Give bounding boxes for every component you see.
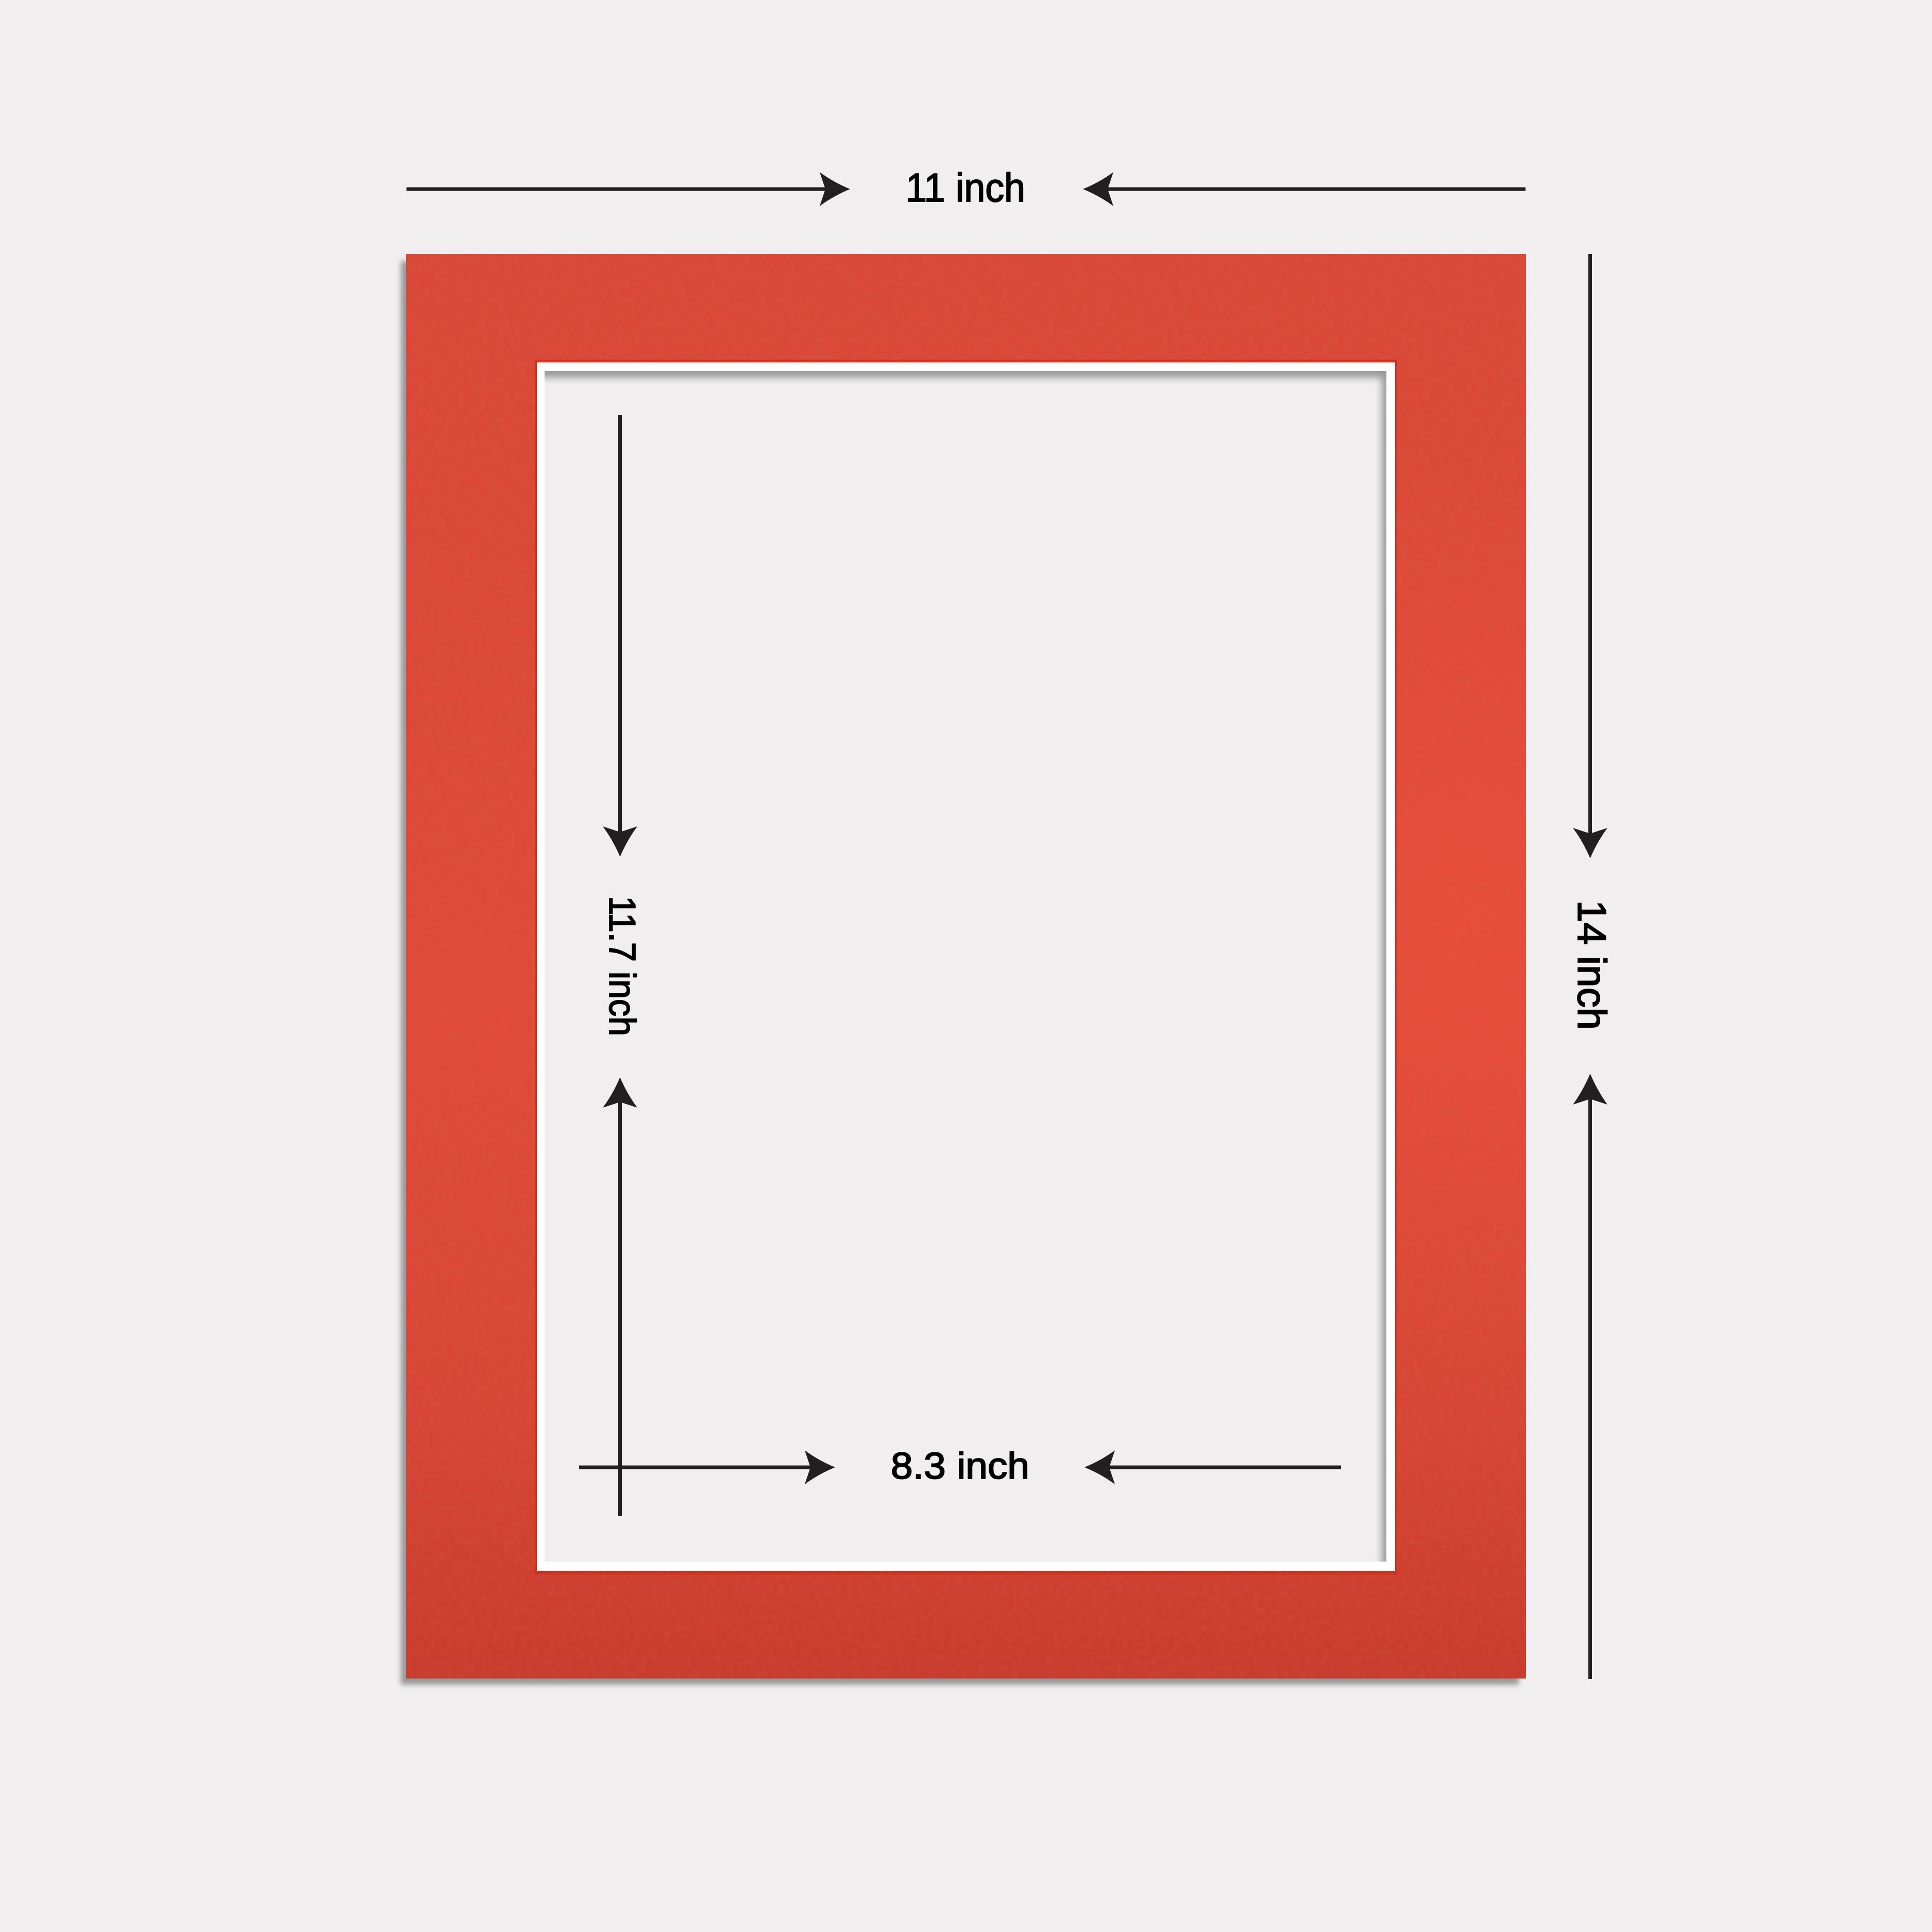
mat board paper texture <box>406 254 1526 1679</box>
dimension: overall height 14 inch <box>1569 254 1615 1679</box>
arrow: opening width right <box>1084 1450 1341 1484</box>
mat board drop shadow <box>401 261 1519 1685</box>
label: 11.7 inch: 11.7 inch <box>601 896 642 1036</box>
label: 14 inch: 14 inch <box>1569 900 1615 1030</box>
arrow: height top <box>1573 254 1607 858</box>
arrow: opening height top <box>603 415 637 857</box>
window opening <box>545 371 1386 1562</box>
window inner shadow <box>545 371 1386 1562</box>
arrow: width right <box>1083 172 1526 206</box>
arrow: height bottom <box>1573 1074 1607 1679</box>
dimension: opening height 11.7 inch <box>601 415 642 1516</box>
label: 8.3 inch: 8.3 inch <box>891 1446 1029 1487</box>
arrow: opening width left <box>579 1450 835 1484</box>
arrow: opening height bottom <box>603 1077 637 1516</box>
dimension: overall width 11 inch <box>406 165 1526 210</box>
panel: red mat board <box>401 254 1526 1685</box>
dimension: opening width 8.3 inch <box>579 1446 1341 1487</box>
mat board surface <box>406 254 1526 1679</box>
mat board lighter right glow <box>406 254 1526 1679</box>
bevel cut edge <box>535 360 1397 1574</box>
white bevel <box>537 362 1395 1571</box>
bevel top highlight <box>537 362 1395 363</box>
arrow: width left <box>406 172 850 206</box>
label: 11 inch: 11 inch <box>906 165 1025 210</box>
